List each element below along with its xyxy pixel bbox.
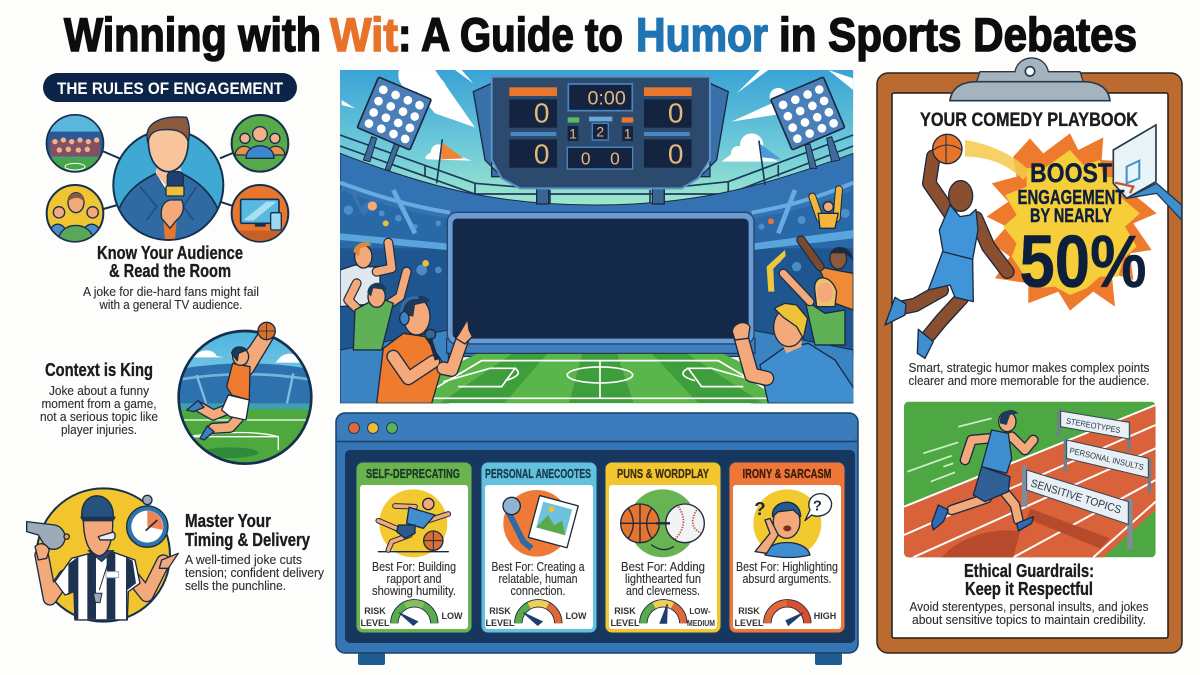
big screen bbox=[447, 212, 755, 353]
hurdle: sensitive topics bbox=[1025, 466, 1130, 549]
text: know your audience: & Read the Room bbox=[109, 261, 231, 281]
scoreboard bbox=[473, 77, 728, 204]
icon: striped referee bbox=[42, 496, 178, 620]
icon: leaping athlete bbox=[187, 322, 275, 440]
card: puns and wordplay bbox=[605, 462, 721, 633]
text: know your audience: Know Your Audience bbox=[97, 243, 243, 263]
text: ethical guardrails bbox=[910, 561, 1149, 627]
commentator with headset bbox=[377, 296, 472, 403]
scoreboard: 1 bbox=[624, 126, 632, 142]
icon: group of people bbox=[232, 115, 288, 172]
right cheering fans bbox=[732, 189, 855, 403]
gauge: low-medium risk bbox=[643, 603, 683, 623]
panel: clipboard comedy playbook bbox=[877, 58, 1182, 653]
illustration: dunk and stat burst bbox=[885, 125, 1182, 358]
card: personal anecdotes: connection. bbox=[510, 584, 566, 598]
icon: stopwatch bbox=[127, 495, 168, 547]
card: irony and sarcasm: Best For: Highlighting bbox=[736, 560, 838, 574]
text: master your timing and delivery: sells the punchline. bbox=[185, 578, 286, 593]
gauge: low risk with color scale bbox=[518, 603, 558, 625]
window feet bbox=[358, 653, 842, 665]
scoreboard: 0 bbox=[534, 98, 549, 129]
icon: stumbling player bbox=[378, 489, 448, 557]
card: puns and wordplay: LEVEL bbox=[610, 618, 640, 628]
window frame bbox=[336, 413, 858, 653]
card: irony and sarcasm: IRONY & SARCASM bbox=[742, 467, 832, 481]
text: master your timing and delivery: Timing & Delivery bbox=[185, 530, 310, 550]
card: puns and wordplay: lighthearted fun bbox=[625, 572, 701, 586]
card: irony and sarcasm: absurd arguments. bbox=[742, 572, 832, 586]
icon: hand whistle bbox=[27, 522, 69, 560]
heading pill: THE RULES OF ENGAGEMENT bbox=[57, 79, 284, 98]
scoreboard: 0 bbox=[581, 149, 590, 169]
card: personal anecdotes: LEVEL bbox=[485, 618, 515, 628]
gauge: low risk bbox=[394, 603, 434, 625]
text: context is king bbox=[40, 360, 158, 437]
scoreboard: 2 bbox=[596, 124, 604, 140]
card: personal anecdotes: relatable, human bbox=[498, 572, 578, 586]
card: irony and sarcasm bbox=[729, 462, 845, 633]
card: self-deprecating: SELF-DEPRECATING bbox=[366, 467, 460, 481]
icon: basketball hoop bbox=[1113, 125, 1182, 220]
illustration: runner and hurdles bbox=[904, 402, 1156, 557]
clouds bbox=[342, 70, 854, 162]
card: puns and wordplay: LOW- bbox=[689, 607, 711, 616]
icon: basketball and baseball bbox=[621, 489, 704, 557]
illustration: referee with whistle and stopwatch bbox=[27, 488, 178, 622]
scoreboard: 1 bbox=[569, 126, 577, 142]
icon: television and phone bbox=[230, 185, 290, 244]
icon: confused man with question marks bbox=[753, 489, 832, 557]
hurdle: personal insults: PERSONAL INSULTS bbox=[1069, 445, 1145, 472]
text: context is king: not a serious topic like bbox=[40, 409, 158, 424]
icon: ball trail bbox=[965, 140, 1030, 180]
heading pill bbox=[43, 73, 297, 102]
card: self-deprecating: Best For: Building bbox=[372, 560, 456, 574]
icon: clipboard clip bbox=[950, 58, 1110, 101]
card: puns and wordplay: Best For: Adding bbox=[621, 560, 705, 574]
text: context is king: Joke about a funny bbox=[49, 383, 149, 398]
text: master your timing and delivery bbox=[185, 511, 324, 593]
card: self-deprecating: LOW bbox=[442, 611, 463, 621]
text: ethical guardrails: Avoid sterentypes, personal insults, and jokes bbox=[910, 599, 1149, 614]
icon: confused man with question marks: ? bbox=[754, 498, 766, 519]
left cheering fans bbox=[340, 192, 407, 350]
card: irony and sarcasm: LEVEL bbox=[734, 618, 764, 628]
icon: stadium crowd bbox=[47, 115, 103, 172]
stadium flags bbox=[437, 139, 781, 185]
scoreboard: 0 bbox=[668, 98, 683, 129]
scoreboard: 0 bbox=[668, 138, 683, 169]
upper stand and crowd bbox=[340, 135, 853, 358]
card: puns and wordplay: RISK bbox=[614, 606, 636, 616]
title: Humor bbox=[636, 8, 768, 61]
panel: browser window of humor types bbox=[336, 413, 858, 665]
scoreboard: 0 bbox=[610, 149, 620, 169]
hurdle: stereotypes: STEREOTYPES bbox=[1065, 416, 1122, 435]
text: smart strategic humor: Smart, strategic humor makes complex points bbox=[908, 360, 1150, 375]
stat: boost engagement by nearly 50 percent: BY NEARLY bbox=[1030, 206, 1112, 227]
card: puns and wordplay: and cleverness. bbox=[626, 584, 700, 598]
hurdle: personal insults bbox=[1065, 437, 1149, 493]
text: ethical guardrails: Ethical Guardrails: bbox=[964, 561, 1094, 581]
text: smart strategic humor bbox=[908, 360, 1150, 388]
scoreboard: 0:00 bbox=[587, 88, 626, 109]
text: know your audience bbox=[83, 243, 259, 312]
title bbox=[64, 8, 1137, 61]
card: self-deprecating: LEVEL bbox=[360, 618, 390, 628]
card: personal anecdotes bbox=[481, 462, 597, 633]
card: puns and wordplay: PUNS & WORDPLAY bbox=[617, 467, 709, 481]
icon: runner bbox=[932, 410, 1033, 531]
text: master your timing and delivery: tension; confident delivery bbox=[185, 565, 324, 580]
panel: the rules of engagement bbox=[27, 73, 324, 622]
card: personal anecdotes: Best For: Creating a bbox=[492, 560, 585, 574]
text: context is king: Context is King bbox=[45, 360, 153, 380]
title: in Sports Debates bbox=[779, 8, 1137, 61]
icon: confused man with question marks: ? bbox=[813, 499, 822, 515]
card: self-deprecating: showing humility. bbox=[372, 584, 456, 598]
card: self-deprecating: RISK bbox=[364, 606, 386, 616]
card: irony and sarcasm: HIGH bbox=[814, 611, 836, 621]
text: know your audience: with a general TV audience. bbox=[99, 297, 243, 312]
card: personal anecdotes: LOW bbox=[566, 611, 587, 621]
gauge: high risk bbox=[767, 603, 807, 625]
text: ethical guardrails: about sensitive topics to maintain credibility. bbox=[912, 612, 1146, 627]
card: self-deprecating bbox=[356, 462, 472, 633]
text: context is king: moment from a game, bbox=[42, 396, 156, 411]
text: know your audience: A joke for die-hard fans might fail bbox=[83, 284, 259, 299]
icon: announcer with microphone bbox=[113, 117, 223, 247]
icon: die-hard fans bbox=[47, 185, 103, 242]
stat: boost engagement by nearly 50 percent: 50% bbox=[1020, 220, 1146, 303]
card: puns and wordplay: MEDIUM bbox=[687, 619, 715, 628]
stat: boost engagement by nearly 50 percent: BOOST bbox=[1030, 158, 1112, 188]
icon: starburst bbox=[987, 133, 1157, 311]
scoreboard: 0 bbox=[534, 138, 549, 169]
icon: microphone and photo bbox=[503, 490, 578, 557]
soccer pitch bbox=[340, 330, 853, 403]
text: master your timing and delivery: Master Your bbox=[185, 511, 271, 531]
hurdle: stereotypes bbox=[1058, 408, 1129, 451]
card: irony and sarcasm: RISK bbox=[738, 606, 760, 616]
text: ethical guardrails: Keep it Respectful bbox=[965, 579, 1093, 599]
text: context is king: player injuries. bbox=[61, 422, 137, 437]
title: Wit bbox=[330, 8, 398, 61]
stat: boost engagement by nearly 50 percent bbox=[1018, 158, 1146, 303]
icon: dunking player bbox=[885, 134, 1007, 358]
text: smart strategic humor: clearer and more memorable for the audience. bbox=[908, 373, 1150, 388]
illustration: jumping player in stadium bbox=[173, 322, 317, 466]
card: personal anecdotes: PERSONAL ANECOOTES bbox=[485, 467, 591, 481]
hurdle: sensitive topics: SENSITIVE TOPICS bbox=[1029, 477, 1123, 516]
illustration: announcer and audience icons bbox=[47, 115, 290, 247]
heading: your comedy playbook: YOUR COMEDY PLAYBOOK bbox=[920, 110, 1138, 131]
card: self-deprecating: rapport and bbox=[386, 572, 442, 586]
text: master your timing and delivery: A well-timed joke cuts bbox=[185, 552, 302, 567]
title: : A Guide to bbox=[398, 8, 623, 61]
title: Winning with bbox=[64, 8, 321, 61]
illustration: stadium scene bbox=[340, 58, 855, 403]
stadium floodlights bbox=[357, 77, 845, 170]
stat: boost engagement by nearly 50 percent: ENGAGEMENT bbox=[1018, 187, 1124, 209]
card: personal anecdotes: RISK bbox=[489, 606, 511, 616]
clipboard board bbox=[877, 73, 1182, 653]
